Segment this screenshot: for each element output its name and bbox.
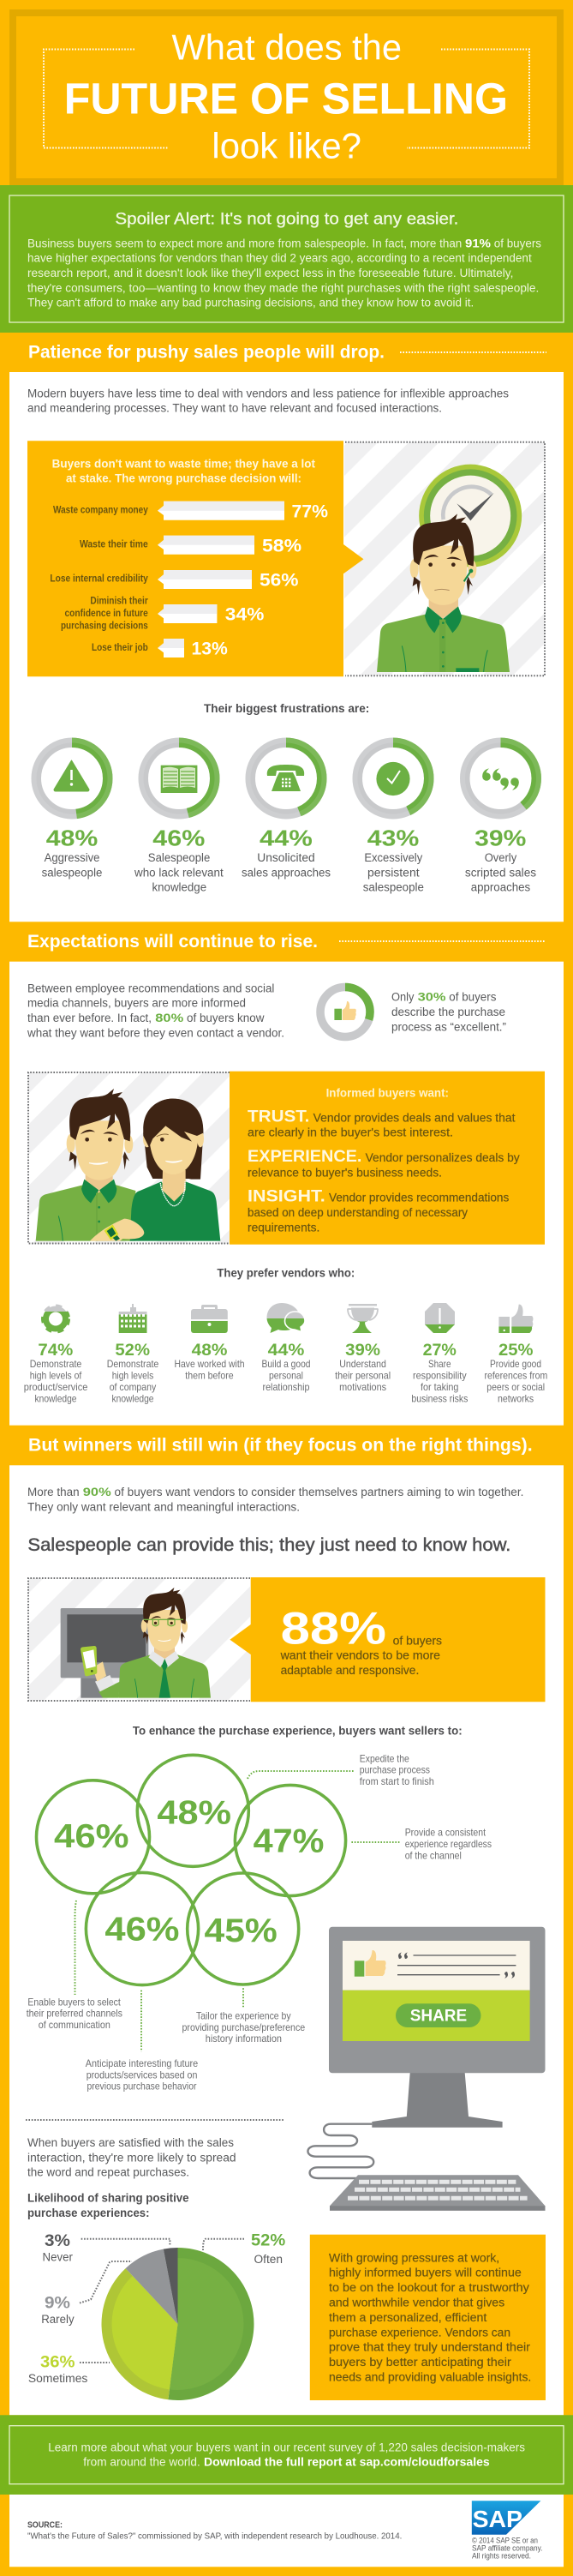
vendor trait: share risk: 27% xyxy=(423,1342,457,1360)
callout: anticipate: previous purchase behavior xyxy=(87,2081,197,2093)
pie label: often xyxy=(203,2231,285,2266)
callout: consistent xyxy=(351,1826,492,1861)
illustration: worried buyer with clock xyxy=(344,442,545,676)
pie label: sometimes: Sometimes xyxy=(28,2372,88,2385)
vendor trait: personal motivations: their personal xyxy=(335,1369,391,1381)
donut: 30 percent excellent xyxy=(320,988,370,1037)
frustration: aggressive salespeople: 48% xyxy=(46,826,98,851)
experience: Vendor personalizes deals by xyxy=(366,1151,520,1164)
frustration: excessively persistent: persistent xyxy=(367,866,420,879)
icon: telephone xyxy=(267,765,304,791)
insight xyxy=(248,1187,510,1234)
callout heading: at stake. The wrong purchase decision will: xyxy=(66,472,301,485)
callout: channels: of communication xyxy=(39,2019,110,2031)
vendor trait: company knowledge xyxy=(107,1304,159,1404)
vendor trait: share risk: Share xyxy=(428,1358,451,1370)
vendor trait: company knowledge: knowledge xyxy=(111,1392,154,1404)
spoiler paragraph: 91% xyxy=(465,237,491,249)
excellent text: describe the purchase xyxy=(391,1006,505,1018)
vendor trait: personal relationship xyxy=(262,1303,310,1393)
header xyxy=(9,9,564,185)
slice: sometimes 36 percent xyxy=(102,2268,178,2399)
callout heading: Buyers don't want to waste time; they have a lot xyxy=(52,457,315,470)
insight: INSIGHT. xyxy=(248,1187,325,1206)
pie label: rarely xyxy=(41,2261,132,2326)
bar: diminish confidence: Diminish their xyxy=(90,596,148,606)
source: SOURCE: xyxy=(27,2519,63,2530)
callout: 88 percent: of buyers xyxy=(393,1634,442,1647)
pie label: never: 3% xyxy=(45,2232,70,2250)
trust xyxy=(248,1107,516,1139)
pie heading xyxy=(27,2192,189,2219)
copyright: SAP affiliate company. xyxy=(472,2544,543,2553)
vendor trait: company knowledge: 52% xyxy=(115,1342,150,1360)
callout: consistent: Provide a consistent xyxy=(405,1826,486,1838)
title: FUTURE OF SELLING xyxy=(64,74,508,123)
excellent text: 30% xyxy=(418,991,445,1004)
title: What does the xyxy=(171,27,402,67)
callout heading xyxy=(52,457,315,485)
download band xyxy=(0,2415,573,2495)
vendor trait: product knowledge: high levels of xyxy=(30,1369,82,1381)
vendor trait: product knowledge xyxy=(24,1306,88,1404)
vendor trait: worked before: them before xyxy=(185,1369,234,1381)
frustration: scripted approaches xyxy=(463,741,539,894)
vendor trait: good references: 25% xyxy=(498,1342,534,1360)
vendor trait: personal motivations: Understand xyxy=(339,1358,386,1370)
vendor trait: company knowledge: high levels xyxy=(112,1369,153,1381)
frustration: excessively persistent: Excessively xyxy=(364,851,422,864)
callout: growing pressures: buyers by better anticipating their xyxy=(329,2356,511,2369)
bar: waste company money xyxy=(53,501,328,521)
share button xyxy=(396,2003,481,2027)
bar: waste their time: 58% xyxy=(262,536,301,555)
vendor trait: personal relationship: 44% xyxy=(268,1342,305,1360)
section heading: winners: But winners will still win (if they focus on the right things). xyxy=(28,1436,533,1456)
callout: growing pressures: to be on the lookout for a trustworthy xyxy=(329,2281,529,2294)
vendor trait: share risk: business risks xyxy=(411,1392,468,1404)
callout: expedite xyxy=(248,1752,434,1787)
callout: consistent: of the channel xyxy=(405,1849,462,1861)
bar: diminish confidence: purchasing decisions xyxy=(61,621,148,632)
stat: 46 percent anticipate: 46% xyxy=(104,1911,180,1948)
experience: EXPERIENCE. xyxy=(248,1147,361,1166)
spoiler heading: Spoiler Alert: It's not going to get any easier. xyxy=(115,210,458,229)
vendor trait: personal motivations: motivations xyxy=(339,1381,386,1393)
bar chart xyxy=(50,501,328,659)
vendor trait: personal motivations: 39% xyxy=(345,1342,380,1360)
satisfied buyers paragraph: interaction, they're more likely to spread xyxy=(27,2151,236,2164)
bar: waste company money: Waste company money xyxy=(53,505,148,515)
bar: waste their time: Waste their time xyxy=(80,539,148,549)
SAP logo xyxy=(472,2501,540,2535)
excellent text: process as “excellent.” xyxy=(391,1020,506,1033)
icon: gear xyxy=(43,1306,69,1331)
callout: anticipate: products/services based on xyxy=(87,2069,197,2081)
callout: expedite: Expedite the xyxy=(360,1752,409,1764)
frustration: aggressive salespeople: salespeople xyxy=(42,866,102,879)
icon: speech bubbles xyxy=(267,1303,305,1333)
callout: channels xyxy=(27,1900,122,2031)
informed buyers paragraph: of buyers know xyxy=(187,1012,265,1024)
callout: 88 percent xyxy=(230,1577,545,1702)
icon: check badge xyxy=(376,762,410,796)
pie label: rarely: Rarely xyxy=(41,2313,75,2326)
pie label: sometimes xyxy=(28,2354,110,2385)
callout: growing pressures: needs and providing valuable insights. xyxy=(329,2370,531,2383)
section heading: expectations: Expectations will continue to rise. xyxy=(27,932,318,952)
bar: waste their time xyxy=(80,536,301,555)
vendor trait: worked before: Have worked with xyxy=(175,1358,245,1370)
slice: rarely 9 percent xyxy=(126,2249,178,2324)
partners paragraph: More than xyxy=(27,1486,80,1498)
trust: TRUST. xyxy=(248,1107,309,1126)
spoiler alert band xyxy=(0,185,573,333)
icon: warning octagon xyxy=(425,1303,455,1333)
frustration: scripted approaches: Overly xyxy=(485,851,516,864)
frustration: unsolicited approaches: Unsolicited xyxy=(257,851,315,864)
partners paragraph: 90% xyxy=(83,1486,111,1498)
vendor trait: good references: peers or social xyxy=(486,1381,545,1393)
informed buyers paragraph: what they want before they even contact a vendor. xyxy=(27,1026,284,1039)
informed buyers paragraph: Between employee recommendations and social xyxy=(27,982,274,994)
frustration: excessively persistent xyxy=(355,741,432,894)
excellent text: of buyers xyxy=(449,991,497,1004)
spoiler paragraph: have higher expectations for vendors than they did 2 years ago, according to a recent independent xyxy=(27,252,532,265)
callout: expedite: purchase process xyxy=(360,1764,430,1776)
insight: requirements. xyxy=(248,1222,319,1234)
callout: tailor: history information xyxy=(206,2033,282,2045)
satisfied buyers paragraph: When buyers are satisfied with the sales xyxy=(27,2136,234,2149)
vendor trait: good references: Provide good xyxy=(490,1358,541,1370)
pie heading: Likelihood of sharing positive xyxy=(27,2192,189,2205)
frustration: lack relevant knowledge: 46% xyxy=(152,826,205,851)
trust: Vendor provides deals and values that xyxy=(313,1111,516,1124)
bar: lose internal credibility xyxy=(50,570,299,591)
spoiler paragraph: of buyers xyxy=(494,237,541,249)
illustration: informed buyers couple xyxy=(28,1072,230,1244)
source: "What's the Future of Sales?" commissioned by SAP, with independent research by Loudhouse. 2014. xyxy=(27,2531,402,2541)
bar: lose internal credibility: Lose internal credibility xyxy=(50,573,148,584)
callout: anticipate: Anticipate interesting future xyxy=(86,2057,198,2069)
vendor trait: product knowledge: Demonstrate xyxy=(30,1358,82,1370)
callout: growing pressures: highly informed buyers will continue xyxy=(329,2267,522,2279)
overlapping circles chart xyxy=(36,1755,346,1985)
callout: growing pressures: them a personalized, efficient xyxy=(329,2311,487,2324)
callout: informed buyers want xyxy=(230,1072,545,1245)
icon: trophy xyxy=(348,1304,379,1333)
pie label: never xyxy=(43,2232,170,2263)
icon: thumbs up xyxy=(498,1305,533,1333)
bar: diminish confidence: confidence in future xyxy=(65,609,148,619)
bar: waste company money: 77% xyxy=(291,501,328,521)
pie label: rarely: 9% xyxy=(45,2294,70,2312)
frustrations heading: Their biggest frustrations are: xyxy=(204,702,369,715)
icon: quotation marks xyxy=(482,768,519,790)
informed buyers paragraph: than ever before. In fact, xyxy=(27,1012,152,1024)
vendor trait: share risk: responsibility xyxy=(413,1369,467,1381)
download band: from around the world. xyxy=(83,2456,200,2469)
title: look like? xyxy=(212,125,361,165)
vendor trait: personal relationship: relationship xyxy=(262,1381,310,1393)
callout: channels: their preferred channels xyxy=(27,2008,122,2020)
callout: 88 percent: want their vendors to be more xyxy=(280,1649,440,1662)
bar: lose their job xyxy=(92,639,228,659)
frustration: scripted approaches: scripted sales xyxy=(465,866,536,879)
callout: tailor: Tailor the experience by xyxy=(196,2009,291,2021)
vendor trait: product knowledge: 74% xyxy=(38,1342,73,1360)
illustration: computer with share screen xyxy=(307,1927,545,2211)
callout: tailor: providing purchase/preference xyxy=(182,2021,305,2033)
icon: warning triangle xyxy=(54,760,89,791)
pie label: often: 52% xyxy=(251,2231,285,2249)
bar: lose internal credibility: 56% xyxy=(260,571,299,591)
partners paragraph xyxy=(27,1486,523,1513)
trust: are clearly in the buyer's best interest. xyxy=(248,1126,453,1139)
cable xyxy=(307,2124,373,2178)
enhance heading: To enhance the purchase experience, buyers want sellers to: xyxy=(133,1725,463,1738)
spoiler paragraph: research report, and it doesn't look like they'll expect less in the foreseeable future. Ultimately, xyxy=(27,267,513,279)
satisfied buyers paragraph: the word and repeat purchases. xyxy=(27,2166,189,2179)
spoiler paragraph xyxy=(27,237,541,309)
spoiler paragraph: they're consumers, too—wanting to know they made the right purchases with the right salespeople. xyxy=(27,281,539,294)
vendor trait: personal relationship: personal xyxy=(269,1369,303,1381)
pie label: sometimes: 36% xyxy=(40,2354,75,2372)
vendor trait: personal relationship: Build a good xyxy=(262,1358,310,1370)
icon: briefcase xyxy=(191,1305,228,1333)
partners paragraph: of buyers want vendors to consider themselves partners aiming to win together. xyxy=(115,1486,523,1498)
SAP logo: SAP xyxy=(473,2506,522,2532)
experience xyxy=(248,1147,520,1179)
spoiler paragraph: Business buyers seem to expect more and more from salespeople. In fact, more than xyxy=(27,237,462,249)
panel: winners xyxy=(9,1465,564,2415)
callout: growing pressures: and worthwhile vendor that gives xyxy=(329,2297,504,2309)
bar: lose their job: 13% xyxy=(192,639,228,659)
frustration: unsolicited approaches xyxy=(242,741,331,879)
stat: 46 percent channels: 46% xyxy=(54,1818,129,1855)
frustration: unsolicited approaches: 44% xyxy=(260,826,313,851)
frustration: aggressive salespeople: Aggressive xyxy=(45,851,99,864)
callout: growing pressures: purchase experience. Vendors can xyxy=(329,2326,510,2339)
panel: patience xyxy=(9,372,564,922)
copyright: © 2014 SAP SE or an xyxy=(472,2537,538,2545)
monitor xyxy=(329,1927,545,2128)
frustration: lack relevant knowledge xyxy=(134,741,224,894)
informed buyers paragraph: 80% xyxy=(155,1012,183,1024)
intro paragraph xyxy=(27,387,509,415)
vendor trait: worked before xyxy=(175,1305,245,1381)
prefer vendors heading: They prefer vendors who: xyxy=(217,1266,355,1279)
download band: Learn more about what your buyers want in our recent survey of 1,220 sales decision-makers xyxy=(48,2441,525,2453)
frustration: scripted approaches: 39% xyxy=(475,826,526,851)
vendor trait: good references: references from xyxy=(485,1369,547,1381)
callout: 88 percent: 88% xyxy=(281,1603,386,1654)
callout: growing pressures xyxy=(310,2235,546,2400)
bar: diminish confidence xyxy=(61,596,265,632)
excellent text xyxy=(391,991,506,1033)
experience: relevance to buyer's business needs. xyxy=(248,1166,442,1179)
callout: buyers at stake xyxy=(27,441,363,676)
vendor trait: good references: networks xyxy=(498,1392,534,1404)
satisfied buyers paragraph xyxy=(27,2136,236,2179)
footer panel xyxy=(9,2495,564,2567)
frustration: lack relevant knowledge: knowledge xyxy=(152,881,206,894)
frustration: lack relevant knowledge: who lack relevant xyxy=(134,866,224,879)
frustration: excessively persistent: salespeople xyxy=(363,881,424,894)
stat: 48 percent expedite: 48% xyxy=(157,1795,231,1832)
excellent text: Only xyxy=(391,991,415,1004)
frustration: unsolicited approaches: sales approaches xyxy=(242,866,331,879)
bar: diminish confidence: 34% xyxy=(225,605,265,625)
panel: expectations xyxy=(9,962,564,1426)
pie heading: purchase experiences: xyxy=(27,2207,149,2219)
vendor trait: worked before: 48% xyxy=(192,1342,228,1360)
icon: open book xyxy=(161,766,197,793)
partners paragraph: They only want relevant and meaningful interactions. xyxy=(27,1500,300,1513)
intro paragraph: Modern buyers have less time to deal with vendors and less patience for inflexible approaches xyxy=(27,387,509,399)
vendor trait: share risk: for taking xyxy=(421,1381,458,1393)
callout: channels: Enable buyers to select xyxy=(27,1996,121,2008)
callout: anticipate xyxy=(86,1991,198,2093)
stat: 45 percent tailor: 45% xyxy=(204,1912,278,1949)
section heading: patience: Patience for pushy sales people will drop. xyxy=(28,342,385,362)
pie label: never: Never xyxy=(43,2250,73,2263)
pie chart xyxy=(102,2248,254,2400)
pie label: often: Often xyxy=(254,2253,283,2266)
frustration: excessively persistent: 43% xyxy=(367,826,419,851)
copyright: All rights reserved. xyxy=(472,2552,531,2561)
callout: expedite: from start to finish xyxy=(360,1775,434,1787)
share button: SHARE xyxy=(410,2008,467,2026)
salespeople subheading: Salespeople can provide this; they just need to know how. xyxy=(27,1535,510,1555)
copyright xyxy=(472,2537,543,2561)
vendor trait: good references xyxy=(485,1305,547,1404)
spoiler paragraph: They can't afford to make any bad purchasing decisions, and they know how to avoid it. xyxy=(27,297,474,309)
callout: consistent: experience regardless xyxy=(405,1838,492,1850)
vendor trait: product knowledge: product/service xyxy=(24,1381,88,1393)
frustration: scripted approaches: approaches xyxy=(471,881,530,894)
informed buyers paragraph xyxy=(27,982,284,1039)
intro paragraph: and meandering processes. They want to have relevant and focused interactions. xyxy=(27,402,442,415)
slice: never 3 percent xyxy=(164,2248,178,2324)
icon: thumbs up xyxy=(334,1001,356,1020)
callout: informed buyers want: Informed buyers want: xyxy=(326,1086,449,1099)
divider xyxy=(26,2119,284,2121)
stat: 47 percent consistent: 47% xyxy=(254,1823,324,1860)
insight: based on deep understanding of necessary xyxy=(248,1206,468,1219)
download band: Download the full report at sap.com/cloudforsales xyxy=(204,2456,490,2469)
vendor trait: product knowledge: knowledge xyxy=(34,1392,77,1404)
vendor trait: share risk xyxy=(411,1303,468,1404)
callout: 88 percent: adaptable and responsive. xyxy=(281,1664,419,1677)
vendor trait: company knowledge: Demonstrate xyxy=(107,1358,159,1370)
vendor trait: personal motivations xyxy=(335,1304,391,1393)
frustration: aggressive salespeople xyxy=(34,741,110,879)
source xyxy=(27,2519,402,2541)
slice: often 52 percent xyxy=(168,2248,254,2400)
illustration: salesperson with phone xyxy=(28,1578,250,1701)
insight: Vendor provides recommendations xyxy=(329,1192,510,1204)
callout: growing pressures: With growing pressures at work, xyxy=(329,2251,499,2264)
vendor trait: company knowledge: of company xyxy=(110,1381,156,1393)
icon: office building xyxy=(119,1304,147,1333)
frustration: lack relevant knowledge: Salespeople xyxy=(148,851,210,864)
informed buyers paragraph: media channels, buyers are more informed xyxy=(27,997,246,1010)
keyboard xyxy=(330,2175,545,2211)
callout: growing pressures: prove that they truly understand their xyxy=(329,2341,531,2354)
bar: lose their job: Lose their job xyxy=(92,643,148,653)
title xyxy=(64,27,508,165)
callout: tailor xyxy=(182,1988,305,2045)
